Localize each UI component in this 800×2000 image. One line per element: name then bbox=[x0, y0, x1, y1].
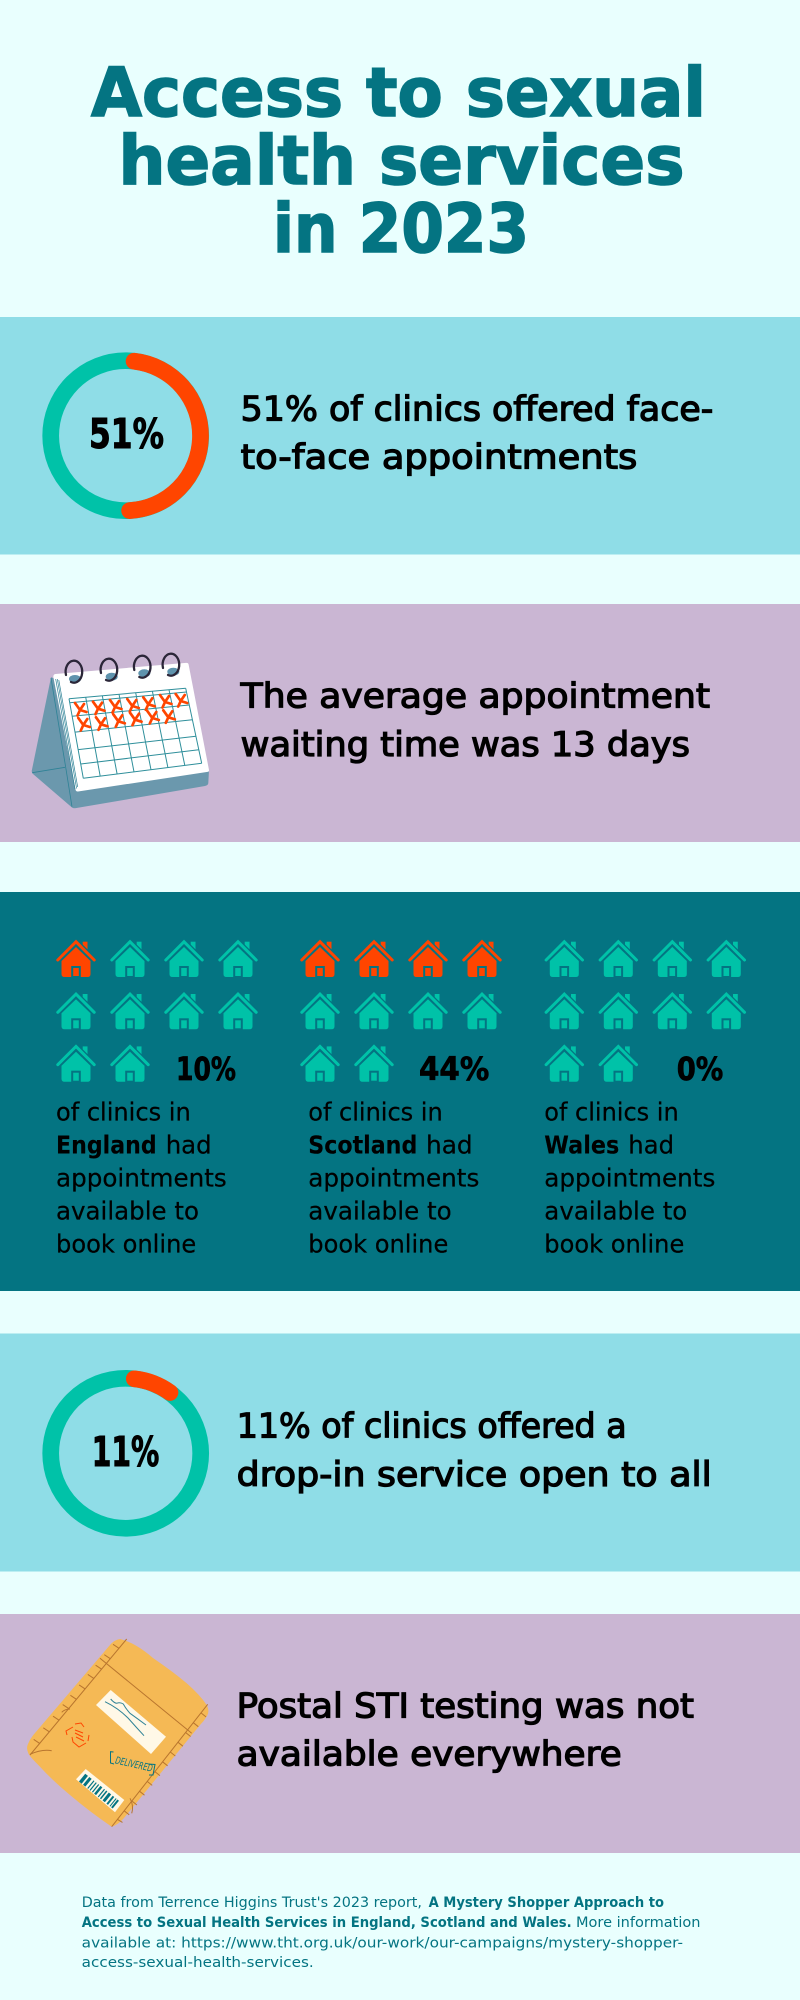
text: Wales bbox=[544, 1098, 715, 1259]
barcode bbox=[76, 1769, 124, 1812]
title bbox=[91, 54, 706, 269]
donut chart: 11% bbox=[51, 1378, 201, 1528]
column: Scotland bbox=[302, 942, 500, 1259]
statement: drop-in: 11% of clinics offered a bbox=[237, 1407, 627, 1447]
stat: Wales 0%: 0% bbox=[677, 1050, 723, 1088]
text: Scotland: had bbox=[426, 1130, 473, 1160]
stat: England 10%: 10% bbox=[176, 1050, 236, 1088]
calendar binding holes bbox=[69, 668, 179, 683]
calendar rings bbox=[66, 654, 179, 683]
envelope seams bbox=[30, 1639, 208, 1827]
footer: source note: More information bbox=[576, 1915, 700, 1931]
text: Scotland bbox=[308, 1098, 479, 1259]
shipping label bbox=[96, 1690, 166, 1754]
text: England bbox=[56, 1098, 227, 1259]
icon grid: Wales houses bbox=[546, 942, 744, 1082]
icon grid: England houses bbox=[58, 942, 256, 1082]
text: Wales: Wales bbox=[544, 1130, 619, 1160]
text: Wales: had bbox=[628, 1130, 674, 1160]
delivered stamp bbox=[110, 1752, 155, 1775]
icon: parcel envelope bbox=[27, 1639, 208, 1827]
text: England: appointments bbox=[56, 1164, 227, 1192]
column: Wales bbox=[544, 942, 744, 1259]
text: Scotland: Scotland bbox=[308, 1130, 417, 1160]
text: Wales: of clinics in bbox=[544, 1098, 679, 1127]
text: England: available to bbox=[56, 1196, 199, 1226]
statement: postal testing: available everywhere bbox=[237, 1735, 622, 1775]
text: England: of clinics in bbox=[56, 1098, 191, 1127]
text: Scotland: book online bbox=[308, 1230, 448, 1259]
footer: source note bbox=[82, 1895, 700, 1971]
text: Scotland: appointments bbox=[308, 1164, 479, 1192]
stamp bbox=[66, 1723, 89, 1747]
statement: face-to-face bbox=[241, 390, 713, 477]
text: England: England bbox=[56, 1130, 157, 1160]
statement: drop-in: drop-in service open to all bbox=[237, 1455, 712, 1495]
text: Scotland: of clinics in bbox=[308, 1098, 443, 1127]
panel: online booking bbox=[0, 892, 800, 1291]
donut chart: 51% bbox=[51, 361, 201, 511]
statement: drop-in bbox=[237, 1407, 712, 1495]
panel: waiting time bbox=[0, 604, 800, 842]
statement: waiting time bbox=[240, 677, 710, 765]
donut chart: 11%: 11% bbox=[92, 1428, 159, 1476]
panel: face-to-face appointments bbox=[0, 317, 800, 554]
title: health services bbox=[118, 122, 684, 201]
stat: Scotland 44%: 44% bbox=[419, 1050, 489, 1088]
text: England: had bbox=[166, 1130, 212, 1160]
statement: waiting time: The average appointment bbox=[240, 677, 710, 717]
title: in 2023 bbox=[273, 190, 529, 269]
text: Wales: book online bbox=[544, 1230, 684, 1259]
donut chart: 51%: 51% bbox=[89, 410, 164, 458]
footer: source note: access-sexual-health-services. bbox=[82, 1955, 314, 1971]
icon grid: Scotland houses bbox=[302, 942, 500, 1082]
column: England bbox=[56, 942, 256, 1259]
footer: source note: Access to Sexual Health Services in England, Scotland and Wales. bbox=[82, 1915, 572, 1931]
statement: waiting time: waiting time was 13 days bbox=[241, 725, 690, 765]
statement: postal testing: Postal STI testing was not bbox=[237, 1686, 694, 1726]
delivered stamp: DELIVERED bbox=[114, 1755, 154, 1775]
statement: postal testing bbox=[237, 1686, 694, 1775]
panel: drop-in service bbox=[0, 1334, 800, 1572]
panel: postal testing bbox=[0, 1614, 800, 1853]
statement: face-to-face: to-face appointments bbox=[241, 437, 637, 477]
text: Wales: appointments bbox=[544, 1164, 715, 1192]
text: Wales: available to bbox=[544, 1196, 687, 1226]
title: Access to sexual bbox=[91, 54, 706, 133]
statement: face-to-face: 51% of clinics offered face- bbox=[241, 390, 713, 430]
text: Scotland: available to bbox=[308, 1196, 452, 1226]
icon: desk calendar bbox=[32, 654, 209, 808]
footer: source note: A Mystery Shopper Approach to bbox=[429, 1895, 664, 1911]
footer: source note: available at: https://www.tht.org.uk/our-work/our-campaigns/mystery-shopper- bbox=[82, 1935, 683, 1951]
text: England: book online bbox=[56, 1230, 196, 1259]
footer: source note: Data from Terrence Higgins Trust's 2023 report, bbox=[82, 1895, 422, 1911]
